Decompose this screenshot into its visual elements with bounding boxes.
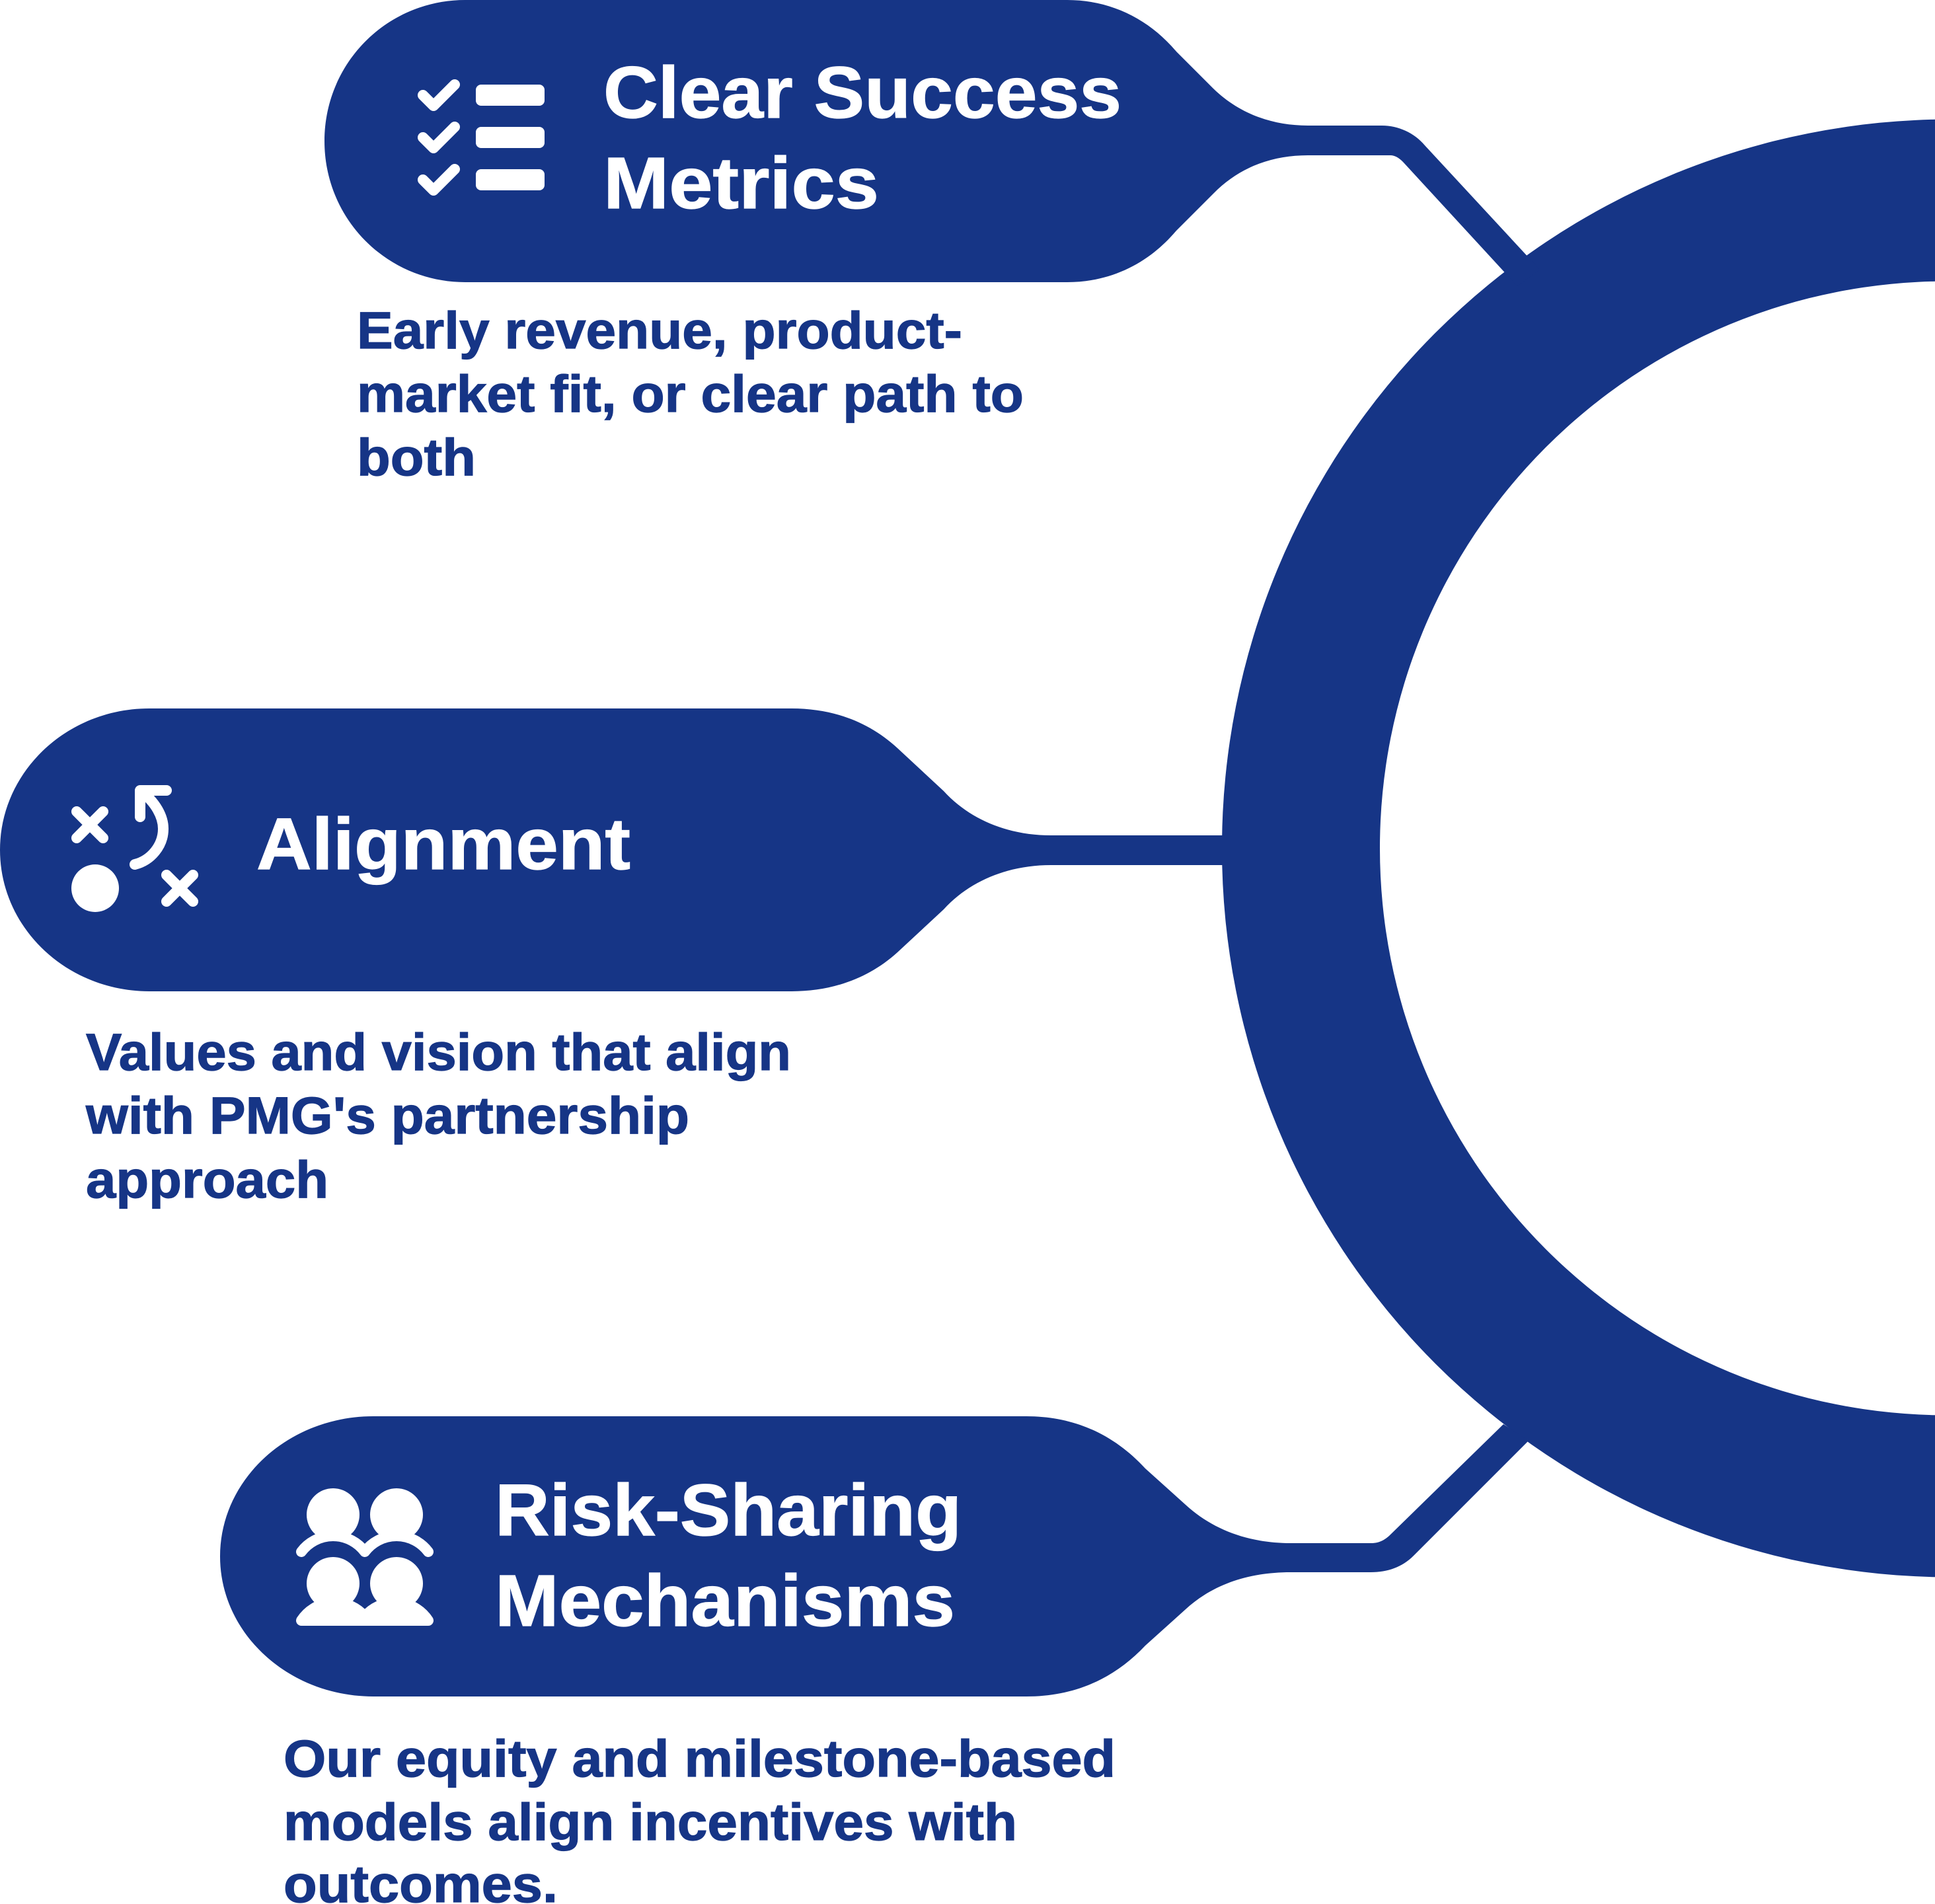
heading: clear success metrics: Clear Success — [603, 52, 1121, 133]
heading: alignment: Alignment — [256, 804, 630, 885]
heading: clear success metrics: Metrics — [603, 143, 879, 224]
panel: alignment — [0, 708, 1229, 1209]
callout shape: clear success metrics — [324, 0, 1540, 286]
callout shape: alignment — [0, 708, 1229, 991]
panel: risk-sharing mechanisms — [220, 1416, 1529, 1904]
description: alignment: with PMG's partnership — [85, 1086, 689, 1145]
callout shape: risk-sharing mechanisms — [220, 1416, 1529, 1696]
icon: play diagram — [71, 790, 193, 912]
heading: risk-sharing mechanisms: Mechanisms — [495, 1560, 955, 1642]
description: clear success metrics: market fit, or clear path to — [357, 364, 1024, 423]
description: alignment: Values and vision that align — [86, 1022, 791, 1081]
description: risk-sharing mechanisms: Our equity and milestone-based — [284, 1729, 1116, 1788]
icon: people group — [301, 1488, 428, 1620]
panel: clear success metrics — [324, 0, 1540, 486]
description: clear success metrics: Early revenue, product- — [357, 301, 962, 360]
description: clear success metrics: both — [357, 428, 476, 486]
central ring — [1222, 119, 1935, 1577]
heading: risk-sharing mechanisms: Risk-Sharing — [495, 1470, 962, 1551]
icon: checklist — [423, 85, 545, 190]
description: alignment: approach — [86, 1150, 328, 1209]
description: risk-sharing mechanisms: models align incentives with — [284, 1792, 1017, 1851]
